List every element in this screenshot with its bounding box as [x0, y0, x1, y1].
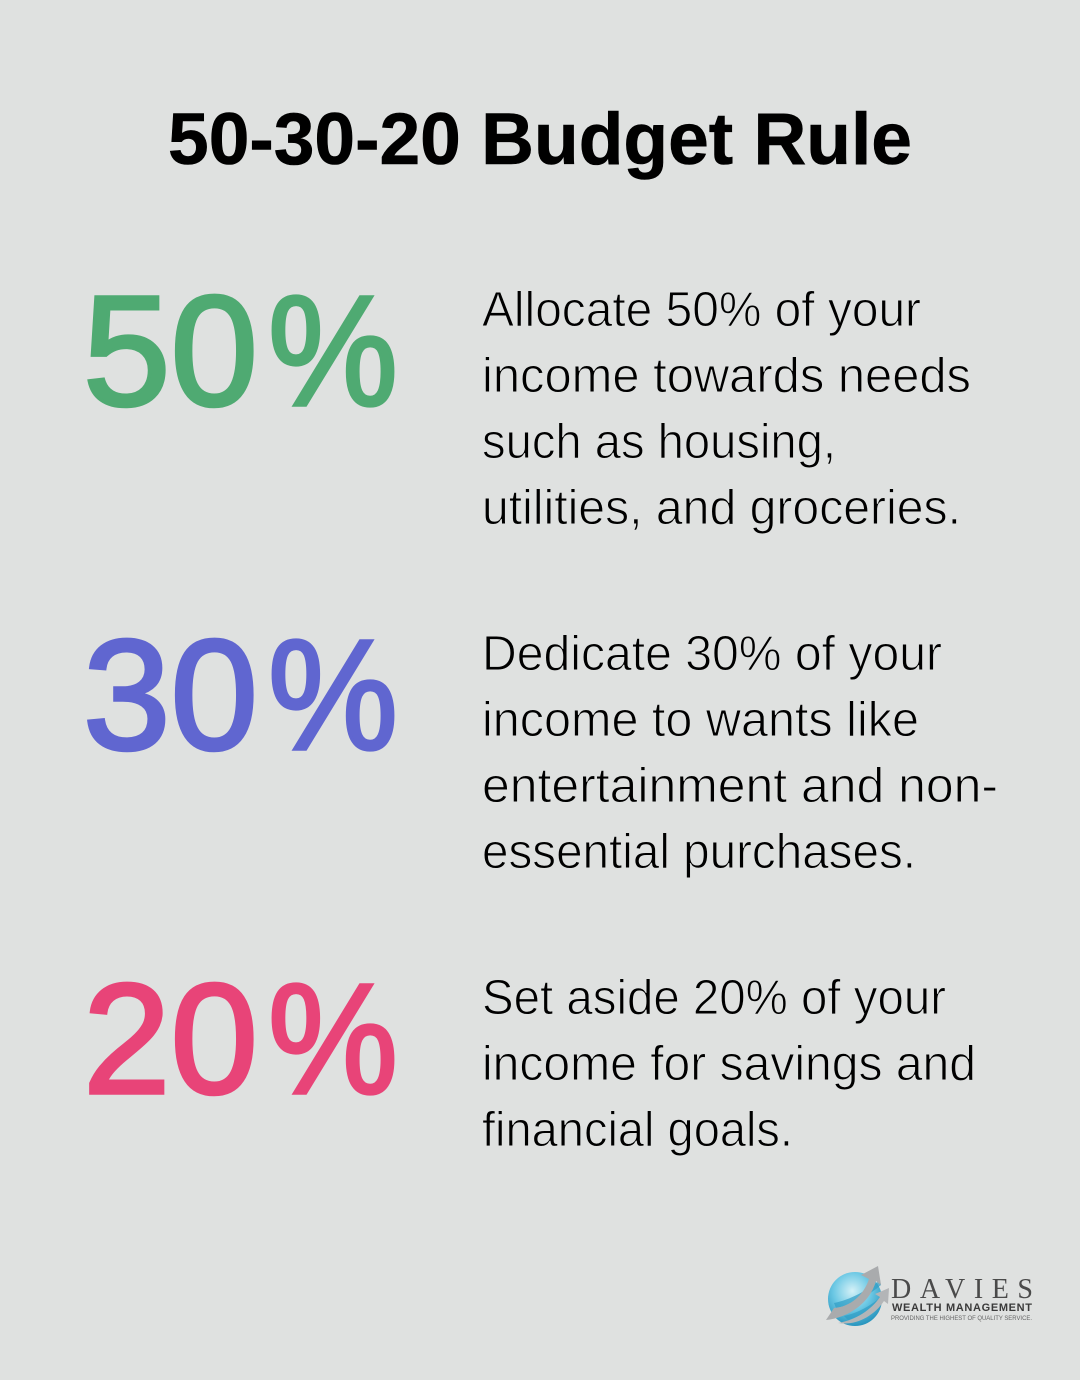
statistic: 50%: 50 — [83, 264, 258, 439]
text block: 30% wants: Dedicate 30% of your — [482, 627, 942, 681]
tagline: wealth management: WEALTH MANAGEMENT — [892, 1302, 1032, 1314]
text block: 20% savings — [482, 971, 976, 1157]
statistic: 30%: 30 — [83, 608, 258, 783]
icon: globe with arrows — [826, 1266, 889, 1326]
statistic: 20% — [83, 952, 398, 1127]
statistic: 50% — [83, 264, 398, 439]
statistic: 30%: % — [268, 608, 398, 783]
statistic: 50%: % — [268, 264, 398, 439]
text block: 50% needs: income towards needs — [482, 349, 971, 403]
statistic: 30% — [83, 608, 398, 783]
text block: 50% needs: Allocate 50% of your — [482, 283, 921, 337]
text block: 30% wants: entertainment and non- — [482, 759, 998, 813]
text block: 50% needs: utilities, and groceries. — [482, 481, 961, 535]
wordmark: DAVIES — [891, 1274, 1033, 1305]
text block: 20% savings: financial goals. — [482, 1103, 793, 1157]
statistic: 20%: 20 — [83, 952, 258, 1127]
text block: 50% needs: such as housing, — [482, 415, 836, 469]
text block: 20% savings: Set aside 20% of your — [482, 971, 946, 1025]
statistic: 20%: % — [268, 952, 398, 1127]
text block: 30% wants: income to wants like — [482, 693, 919, 747]
text block: 50% needs — [482, 283, 971, 535]
logo: Davies Wealth Management — [826, 1266, 1033, 1326]
tagline: quality service: PROVIDING THE HIGHEST OF QUALITY SERVICE. — [891, 1315, 1032, 1322]
text block: 30% wants — [482, 627, 998, 879]
title: 50-30-20 Budget Rule — [168, 99, 912, 180]
text block: 20% savings: income for savings and — [482, 1037, 976, 1091]
text block: 30% wants: essential purchases. — [482, 825, 916, 879]
